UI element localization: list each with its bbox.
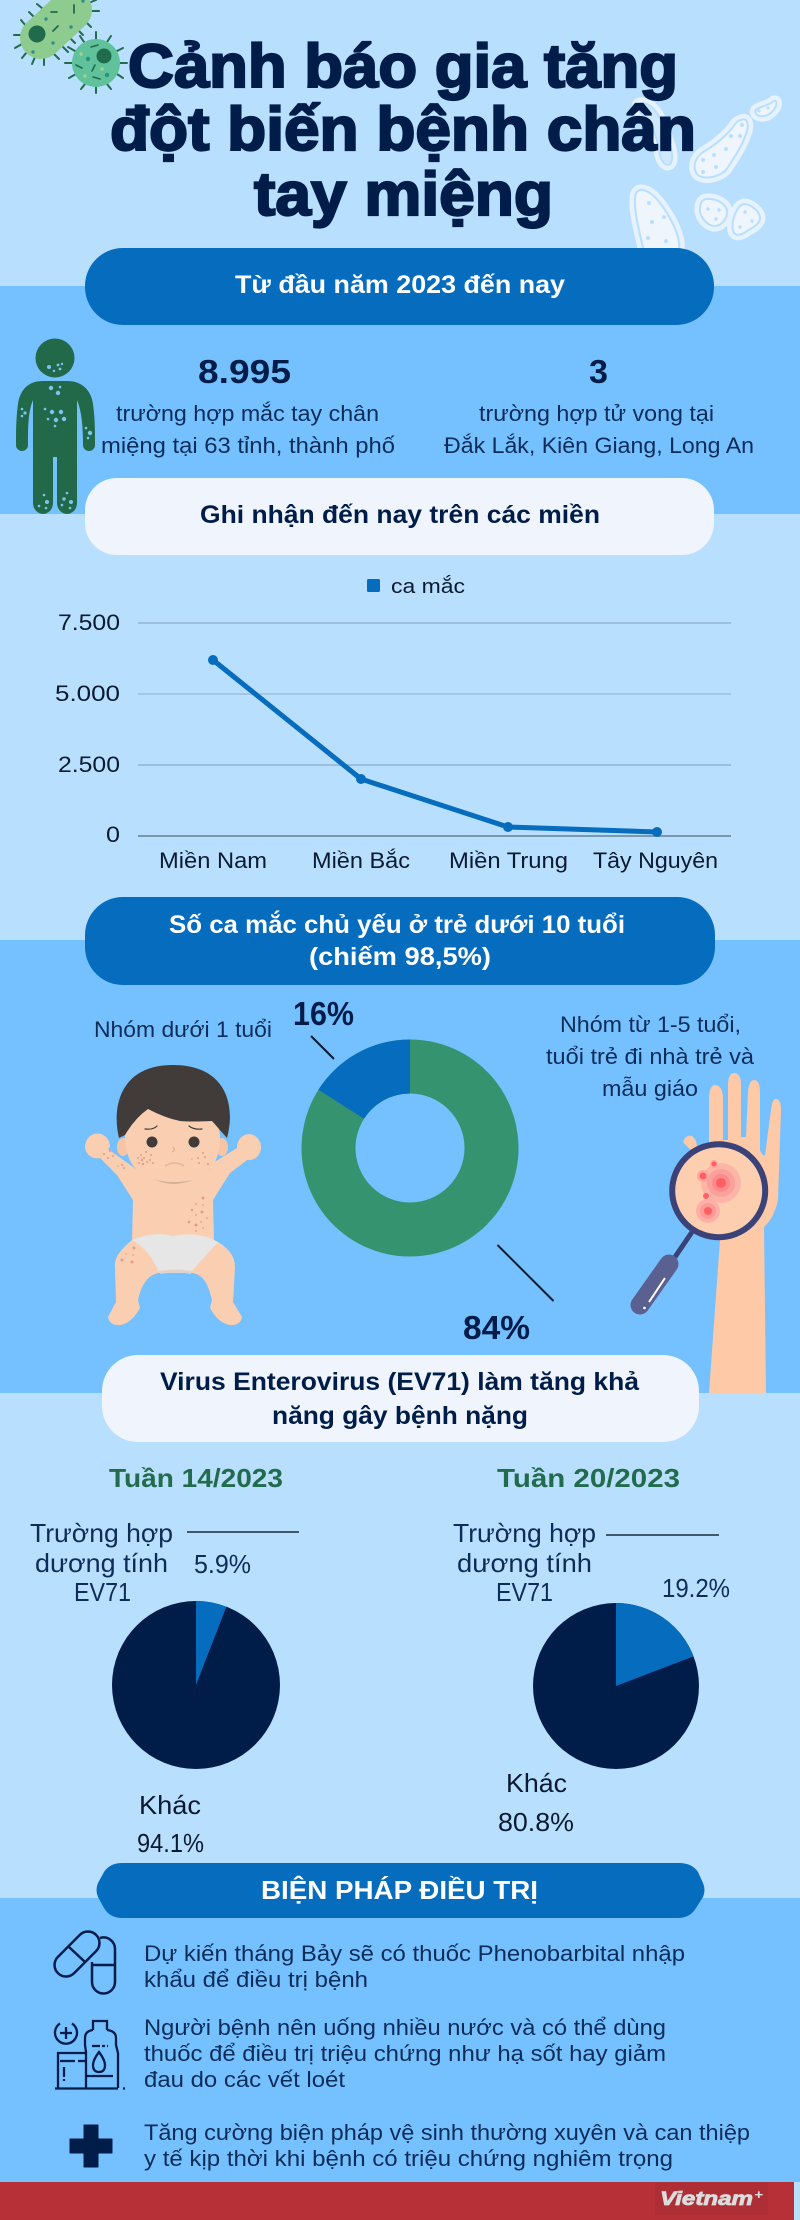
heading pill: under 10 years old: (chiếm 98,5%) (309, 943, 491, 971)
icon: person with rash (16, 338, 95, 514)
logo: Vietnam+: Vietnam (660, 2189, 753, 2210)
y axis labels: 7.500 (58, 610, 120, 635)
stat: 3 deaths: trường hợp tử vong tại (479, 401, 714, 426)
text: fluids and symptom relief: thuốc để điều trị triệu chứng như hạ sốt hay giảm (144, 2041, 666, 2066)
heading pill: under 10 years old: Số ca mắc chủ yếu ở trẻ dưới 10 tuổi (169, 909, 625, 939)
panel: week 14 pie: dương tính (35, 1548, 168, 1578)
text: fluids and symptom relief: Người bệnh nên uống nhiều nước và có thể dùng (144, 2015, 666, 2040)
line chart: cases by region (55, 575, 731, 873)
heading pill: from start of 2023 (85, 248, 714, 325)
label: under 1 year group: Nhóm dưới 1 tuổi (94, 1017, 272, 1042)
panel: week 20 pie: Trường hợp (453, 1518, 596, 1548)
title: tay miệng (254, 160, 553, 228)
chart legend: ca mắc (391, 575, 465, 598)
panel: week 14 pie: Khác (139, 1790, 201, 1820)
panel: week 20 pie: dương tính (457, 1548, 592, 1578)
label: 1-5 years group (546, 1012, 755, 1101)
icon: capsules (50, 1927, 115, 1994)
stat: 8.995 cases: trường hợp mắc tay chân (116, 401, 379, 426)
y axis labels: 5.000 (55, 681, 120, 706)
heading pill: treatment: BIỆN PHÁP ĐIỀU TRỊ (261, 1875, 538, 1905)
panel: week 20 pie: Tuần 20/2023 (497, 1463, 680, 1493)
title: đột biến bệnh chân (110, 95, 696, 163)
icon: medical cross (70, 2125, 112, 2167)
y axis labels (55, 610, 120, 847)
label: 84% (463, 1245, 554, 1346)
stat: 3 deaths: Đắk Lắk, Kiên Giang, Long An (444, 433, 754, 458)
panel: week 14 pie: EV71 (74, 1577, 131, 1607)
text: hygiene and intervention: y tế kịp thời khi bệnh có triệu chứng nghiêm trọng (144, 2146, 673, 2171)
text: medicine import: Dự kiến tháng Bảy sẽ có thuốc Phenobarbital nhập (144, 1941, 685, 1966)
x axis labels: Tây Nguyên (593, 848, 718, 873)
panel: week 14 pie: 5.9% (194, 1549, 251, 1579)
text: hygiene and intervention (144, 2120, 750, 2171)
stat: 8.995 cases: 8.995 (198, 353, 291, 390)
label: 16% (293, 995, 354, 1059)
panel: week 14 pie: Trường hợp (30, 1518, 173, 1548)
stat: 3 deaths (444, 353, 754, 458)
text: hygiene and intervention: Tăng cường biện pháp vệ sinh thường xuyên và can thiệp (144, 2120, 750, 2145)
donut chart: age share (293, 995, 554, 1346)
text: fluids and symptom relief: đau do các vết loét (144, 2067, 345, 2092)
panel: week 20 pie (453, 1463, 730, 1837)
label: 1-5 years group: Nhóm từ 1-5 tuổi, (560, 1012, 741, 1037)
title (110, 32, 696, 228)
label: 84%: 84% (463, 1309, 530, 1346)
icon: hand with magnifier (640, 1073, 781, 1393)
heading pill: under 10 years old (85, 897, 715, 985)
panel: week 20 pie: Khác (506, 1768, 567, 1798)
heading pill: EV71: Virus Enterovirus (EV71) làm tăng khả (160, 1368, 640, 1396)
heading pill: from start of 2023: Từ đầu năm 2023 đến nay (235, 271, 565, 299)
title: Cảnh báo gia tăng (128, 32, 678, 100)
panel: week 14 pie: 94.1% (137, 1828, 204, 1858)
icon: pale bacteria (635, 101, 776, 258)
panel: week 20 pie: 80.8% (498, 1807, 574, 1837)
label: 1-5 years group: tuổi trẻ đi nhà trẻ và (546, 1044, 755, 1069)
text: medicine import: khẩu để điều trị bệnh (144, 1967, 368, 1992)
label: 16%: 16% (293, 995, 354, 1032)
heading pill: by region (85, 478, 714, 555)
text: fluids and symptom relief (144, 2015, 666, 2092)
heading pill: by region: Ghi nhận đến nay trên các miền (200, 501, 600, 529)
stat: 3 deaths: 3 (589, 353, 608, 390)
icon: medicine bottle (55, 2021, 125, 2088)
heading pill: EV71 (102, 1355, 699, 1442)
x axis labels: Miền Trung (449, 848, 568, 873)
icon: baby with rash (85, 1065, 261, 1325)
heading pill: EV71: năng gây bệnh nặng (272, 1402, 528, 1430)
panel: week 20 pie: 19.2% (662, 1573, 730, 1603)
x axis labels: Miền Nam (159, 848, 267, 873)
logo: Vietnam+ (660, 2187, 763, 2210)
label: 1-5 years group: mẫu giáo (602, 1076, 698, 1101)
stat: 8.995 cases (101, 353, 395, 458)
logo: Vietnam+: + (754, 2187, 763, 2202)
x axis labels: Miền Bắc (312, 848, 410, 873)
panel: week 14 pie: Tuần 14/2023 (109, 1463, 283, 1493)
heading pill: treatment (96, 1863, 704, 1918)
chart legend (367, 575, 465, 598)
stat: 8.995 cases: miệng tại 63 tỉnh, thành phố (101, 433, 395, 458)
x axis labels (159, 848, 718, 873)
y axis labels: 0 (106, 822, 120, 847)
y axis labels: 2.500 (58, 752, 120, 777)
panel: week 20 pie: EV71 (496, 1577, 553, 1607)
text: medicine import (144, 1941, 685, 1992)
panel: week 14 pie (30, 1463, 299, 1858)
footer bar (0, 2182, 794, 2220)
icon: green bacteria (14, 0, 127, 93)
data line (208, 655, 662, 837)
